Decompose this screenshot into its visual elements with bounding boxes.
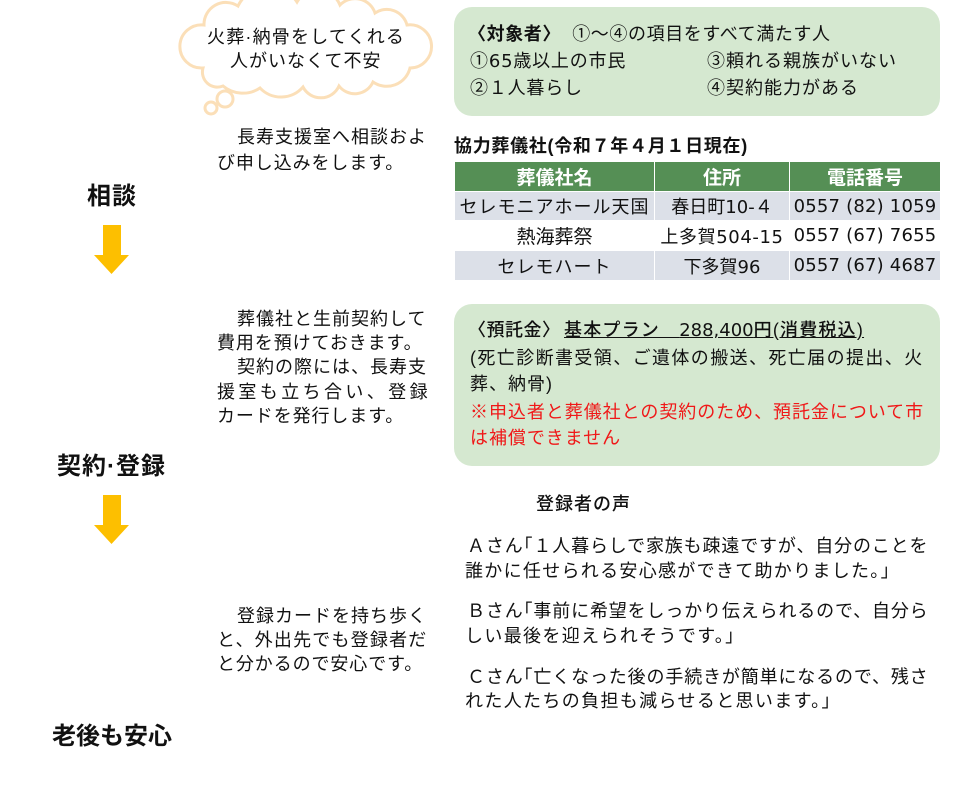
testimonials: Ｂさん｢事前に希望をしっかり伝えられるので、自分ら xyxy=(467,601,929,621)
deposit details: (死亡診断書受領、ご遺体の搬送、死亡届の提出、火 xyxy=(470,348,924,368)
eligibility conditions: ②１人暮らし xyxy=(470,78,583,98)
table heading: 協力葬儀社(令和７年４月１日現在) xyxy=(454,136,748,156)
table: partner funeral companies xyxy=(455,162,940,280)
eligibility conditions: ④契約能力がある xyxy=(707,78,859,98)
description: registration card xyxy=(217,606,427,674)
table: partner funeral companies: 熱海葬祭 xyxy=(516,227,592,248)
arrow: consultation to contract xyxy=(94,225,129,274)
description: registration card: と、外出先でも登録者だ xyxy=(217,630,427,650)
table: partner funeral companies: セレモニアホール天国 xyxy=(460,197,650,217)
description: contract: 葬儀社と生前契約して xyxy=(237,309,426,329)
table: partner funeral companies: 0557 (67) 4687 xyxy=(794,255,936,276)
table: partner funeral companies: 0557 (82) 1059 xyxy=(794,196,936,216)
thought bubble: 人がいなくて不安 xyxy=(230,51,381,71)
step label: consultation: 相談 xyxy=(87,183,137,210)
description: registration card: 登録カードを持ち歩く xyxy=(237,606,427,626)
testimonials xyxy=(465,536,929,711)
description: consultation: 長寿支援室へ相談およ xyxy=(237,127,427,147)
table: partner funeral companies: 住所 xyxy=(703,168,741,189)
panel: deposit xyxy=(454,304,940,466)
table: partner funeral companies: 電話番号 xyxy=(827,168,903,189)
deposit heading: 〈預託金〉 xyxy=(468,320,560,340)
bubble text: 火葬·納骨をしてくれる xyxy=(207,27,405,47)
testimonials: 誰かに任せられる安心感ができて助かりました。｣ xyxy=(465,561,891,581)
testimonials: Ｃさん｢亡くなった後の手続きが簡単になるので、残さ xyxy=(467,667,929,687)
arrow: contract to peace of mind xyxy=(94,495,129,544)
eligibility heading: 〈対象者〉 ①～④の項目をすべて満たす人 xyxy=(468,24,831,44)
eligibility conditions xyxy=(470,51,897,98)
description: contract: 費用を預けておきます。 xyxy=(217,333,423,353)
testimonials: れた人たちの負担も減らせると思います。｣ xyxy=(465,691,832,711)
thought bubble xyxy=(178,0,433,116)
description: contract xyxy=(217,309,431,426)
description: consultation xyxy=(217,127,427,173)
eligibility conditions: ①65歳以上の市民 xyxy=(470,51,626,72)
description: contract: 援室も立ち合い、登録 xyxy=(217,382,431,402)
table: partner funeral companies: 0557 (67) 7655 xyxy=(794,225,936,246)
panel: deposit: 葬、納骨) xyxy=(470,374,553,394)
step label: peace of mind: 老後も安心 xyxy=(52,723,172,750)
testimonials: しい最後を迎えられそうです。｣ xyxy=(465,626,735,646)
description: contract: カードを発行します。 xyxy=(217,406,404,426)
panel: deposit: は補償できません xyxy=(470,428,621,448)
table: partner funeral companies: 春日町10-４ xyxy=(671,197,773,218)
description: consultation: び申し込みをします。 xyxy=(217,153,404,173)
eligibility conditions: ③頼れる親族がいない xyxy=(707,51,897,71)
table: partner funeral companies: セレモハート xyxy=(498,256,612,276)
testimonials: Ａさん｢１人暮らしで家族も疎遠ですが、自分のことを xyxy=(467,536,928,556)
deposit plan price: 基本プラン 288,400円(消費税込) xyxy=(564,320,864,341)
description: contract: 契約の際には、長寿支 xyxy=(237,357,427,377)
description: registration card: と分かるので安心です。 xyxy=(217,654,423,674)
panel: eligibility xyxy=(454,7,940,116)
step label: contract and registration: 契約·登録 xyxy=(57,453,166,480)
table: partner funeral companies: 下多賀96 xyxy=(684,256,760,278)
testimonials heading: 登録者の声 xyxy=(536,494,631,514)
table: partner funeral companies: 上多賀504-15 xyxy=(660,226,784,248)
table: partner funeral companies: 葬儀社名 xyxy=(516,168,592,189)
deposit warning: ※申込者と葬儀社との契約のため、預託金について市 xyxy=(470,402,924,422)
